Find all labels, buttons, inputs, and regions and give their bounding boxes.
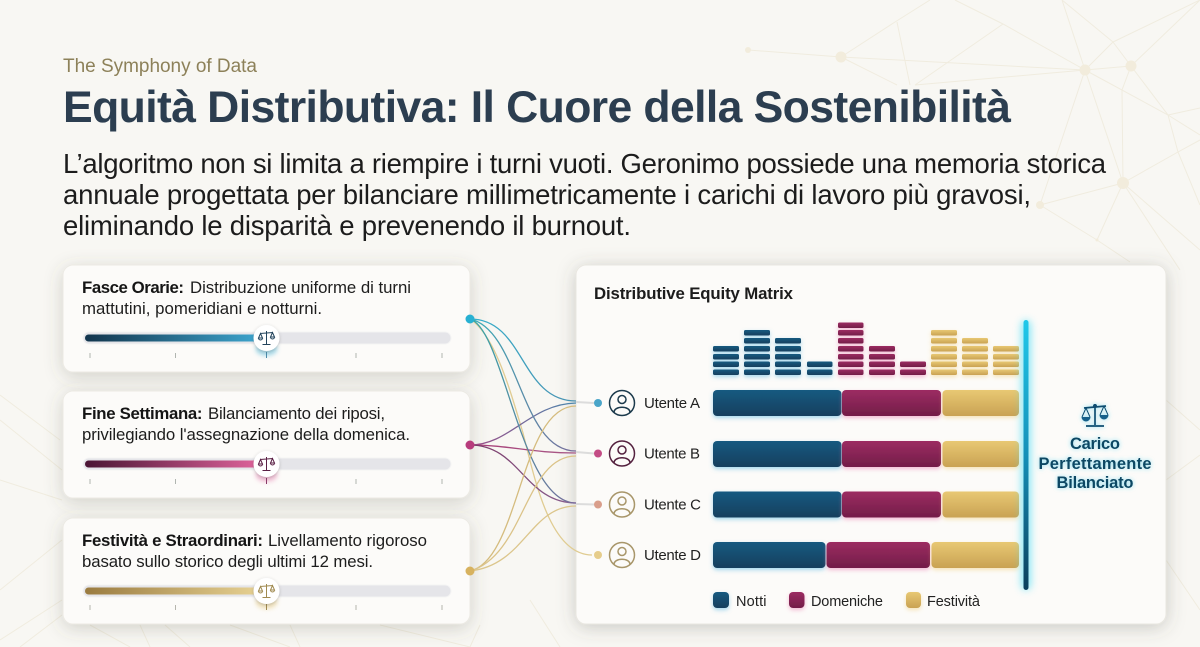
panel: festivita e straordinari (63, 518, 470, 624)
row: utente A (594, 390, 700, 416)
row: utente C: Utente C (644, 496, 701, 514)
icon: user D (610, 542, 634, 568)
balanced label: Carico (1070, 435, 1120, 453)
row: utente D: Utente D (644, 547, 701, 564)
text: festivita: Festività e Straordinari: (82, 531, 263, 550)
row: utente D (594, 542, 701, 568)
balanced label: Bilanciato (1056, 474, 1134, 492)
text: fasce orarie: Fasce Orarie: (82, 278, 184, 297)
row: utente B (594, 441, 700, 466)
panel: distributive equity matrix (576, 265, 1166, 624)
text: fasce orarie: Distribuzione uniforme di turni (190, 278, 411, 297)
text: fine settimana: Fine Settimana: (82, 404, 202, 423)
text: fine settimana: privilegiando l'assegnazione della domenica. (82, 425, 410, 444)
row: utente B: Utente B (644, 446, 700, 462)
row: utente C (594, 492, 701, 517)
balance line (1021, 320, 1031, 590)
text: festivita: basato sullo storico degli ultimi 12 mesi. (82, 552, 373, 571)
legend: Domeniche (811, 594, 883, 610)
stacked bars (713, 390, 1019, 568)
connectors (470, 319, 594, 571)
legend: Festività (927, 594, 981, 610)
text: fasce orarie (82, 278, 411, 318)
balanced label: Perfettamente (1038, 455, 1152, 473)
icon: balance scale (1082, 404, 1108, 426)
icon: scale (258, 457, 274, 470)
eyebrow: The Symphony of Data (63, 56, 257, 77)
icon: scale (258, 331, 274, 344)
balanced label (1038, 435, 1152, 492)
icon: scale (258, 584, 274, 598)
panel: fine settimana (63, 391, 470, 498)
connector source dots (466, 314, 474, 576)
slider: fasce orarie (83, 325, 451, 358)
panel: fasce orarie (63, 265, 470, 372)
description (63, 148, 1107, 241)
text: fine settimana (82, 404, 410, 444)
icon: user B (610, 441, 634, 466)
slider: fine settimana (83, 451, 451, 484)
text: fine settimana: Bilanciamento dei riposi, (208, 404, 385, 423)
text: festivita (82, 531, 427, 571)
row: utente A: Utente A (644, 395, 700, 412)
text: fasce orarie: mattutini, pomeridiani e notturni. (82, 299, 322, 318)
description: L’algoritmo non si limita a riempire i turni vuoti. Geronimo possiede una memoria storica (63, 148, 1107, 179)
legend (713, 592, 981, 610)
description: annuale progettata per bilanciare millimetricamente i carichi di lavoro più gravosi, (63, 179, 1031, 210)
chart title: Distributive Equity Matrix (594, 284, 794, 303)
mini bar chart (713, 322, 1019, 375)
title: Equità Distributiva: Il Cuore della Sostenibilità (63, 83, 1011, 132)
text: festivita: Livellamento rigoroso (268, 531, 427, 550)
legend: Notti (736, 594, 766, 610)
icon: user C (610, 492, 634, 517)
description: eliminando le disparità e prevenendo il burnout. (63, 210, 631, 241)
icon: user A (610, 390, 634, 416)
slider: festivita (83, 578, 451, 610)
